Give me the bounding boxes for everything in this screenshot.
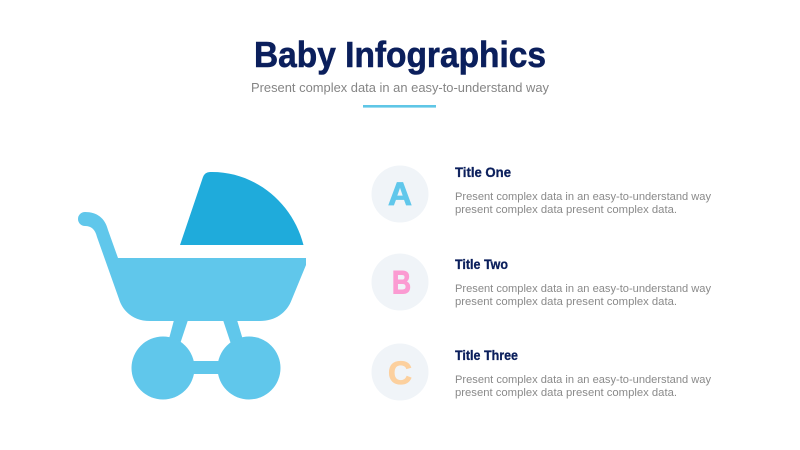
letter B: B	[392, 264, 411, 300]
badge C	[372, 344, 428, 400]
text block C: Present complex data in an easy-to-understand way	[455, 374, 711, 386]
stroller legs and axle	[166, 320, 246, 374]
right wheel	[218, 336, 280, 400]
heading: Title Three: Title Three	[455, 348, 518, 363]
letter C: C	[388, 355, 412, 391]
item A	[372, 165, 711, 222]
item C	[372, 344, 711, 400]
badge B	[372, 254, 428, 310]
item B	[372, 254, 711, 310]
heading: Title Two: Title Two	[455, 257, 508, 272]
item C: present complex data present complex data.	[455, 387, 677, 399]
item A: present complex data present complex data.	[455, 204, 677, 216]
heading: Title One: Title One	[455, 165, 511, 180]
stroller handle and basket	[78, 212, 306, 321]
text block B: Present complex data in an easy-to-understand way	[455, 283, 711, 295]
text block A: Present complex data in an easy-to-understand way	[455, 191, 711, 203]
title underline	[363, 105, 436, 108]
stroller canopy	[180, 172, 304, 245]
badge A	[372, 166, 428, 222]
letter A: A	[388, 176, 412, 212]
left wheel	[132, 336, 194, 400]
subtitle: Present complex data in an easy-to-understand way	[251, 80, 549, 95]
title: Baby Infographics	[254, 34, 546, 75]
item B: present complex data present complex data.	[455, 296, 677, 308]
icon: baby stroller	[78, 172, 306, 400]
